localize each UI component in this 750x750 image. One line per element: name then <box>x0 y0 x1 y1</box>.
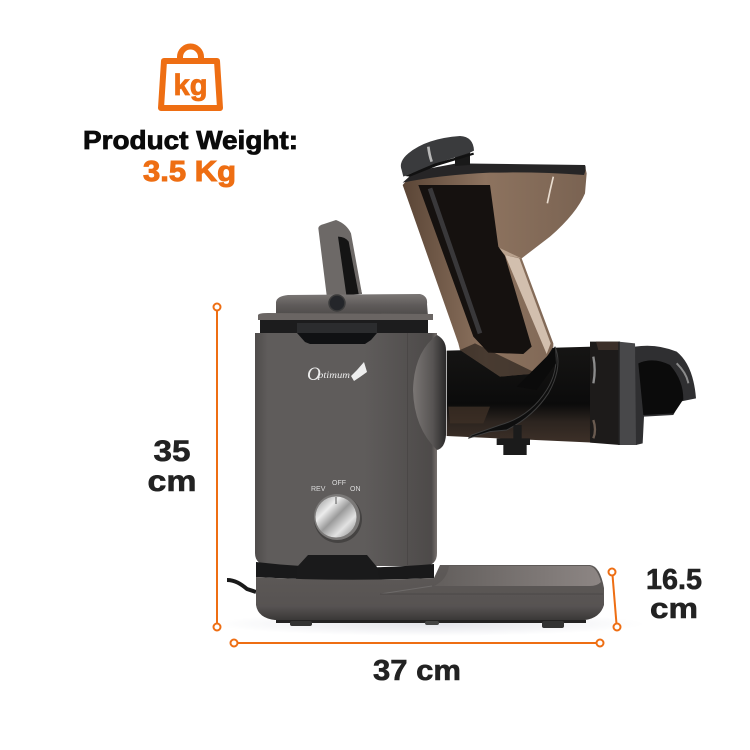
logo <box>307 362 367 385</box>
lower band <box>256 562 434 580</box>
switch labels: ON <box>350 486 360 493</box>
side disc <box>413 335 446 450</box>
housing body <box>255 333 437 566</box>
motor housing <box>255 220 446 580</box>
control knob <box>314 494 362 543</box>
dimension: width 37 cm <box>230 640 604 687</box>
top band <box>260 320 428 333</box>
lid <box>276 294 428 316</box>
drain spout <box>497 425 530 455</box>
value: 3.5 kg: 3.5 Kg <box>143 156 236 188</box>
heading: product weight: Product Weight: <box>83 125 298 155</box>
carry handle <box>318 220 362 301</box>
dimension: height 35 cm <box>148 304 220 630</box>
logo: O <box>307 364 321 385</box>
icon: juicer product <box>227 136 696 628</box>
dimension: depth 16.5 cm: 16.5 <box>646 564 702 596</box>
juicing assembly <box>401 136 696 455</box>
switch labels: OFF <box>332 480 346 487</box>
dimension: width 37 cm: 37 cm <box>373 655 461 687</box>
switch labels <box>311 480 360 493</box>
switch labels: REV <box>311 486 326 493</box>
pivot <box>329 295 345 311</box>
panel: product weight <box>83 47 298 188</box>
hopper <box>403 163 587 377</box>
dimension: depth 16.5 cm <box>608 564 702 630</box>
dimension: height 35 cm: cm <box>148 465 196 498</box>
dimension: depth 16.5 cm: cm <box>650 593 698 625</box>
icon: kg weight bag <box>161 47 220 108</box>
fastening clip <box>468 347 558 438</box>
power cord <box>227 580 256 592</box>
logo: ptimum <box>317 370 351 380</box>
juicing tube <box>447 342 696 445</box>
pusher cap <box>401 136 474 177</box>
floor shadow <box>215 612 645 636</box>
icon: kg weight bag: kg <box>174 69 208 102</box>
dimension: height 35 cm: 35 <box>154 435 190 468</box>
base <box>256 565 604 628</box>
